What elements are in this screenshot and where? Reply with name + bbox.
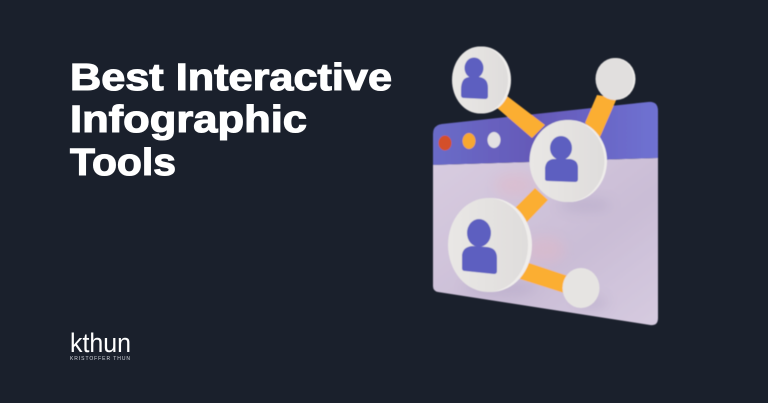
title — [70, 57, 392, 184]
connector: node 4 to node 5 — [520, 262, 568, 293]
window body — [433, 158, 658, 325]
pink glow — [505, 179, 556, 258]
window dots — [438, 132, 500, 150]
logo: kthun: kthun — [70, 328, 131, 358]
title: Tools — [70, 142, 176, 184]
node 5 — [562, 268, 600, 308]
logo: kthun: KRISTOFFER THUN — [70, 356, 130, 362]
connector: node 1 to node 3 — [496, 93, 545, 138]
title: Infographic — [70, 99, 307, 141]
connector: node 2 to node 3 — [585, 95, 617, 137]
title: Best Interactive — [70, 57, 392, 99]
node 2 — [596, 58, 636, 100]
node 3 — [530, 120, 607, 202]
illustration: browser window network — [433, 46, 658, 325]
node shadows on window — [502, 200, 600, 308]
connector: node 3 to node 4 — [514, 188, 548, 223]
window title bar — [433, 102, 658, 165]
node 4 — [448, 198, 532, 292]
node 1 — [452, 46, 511, 114]
